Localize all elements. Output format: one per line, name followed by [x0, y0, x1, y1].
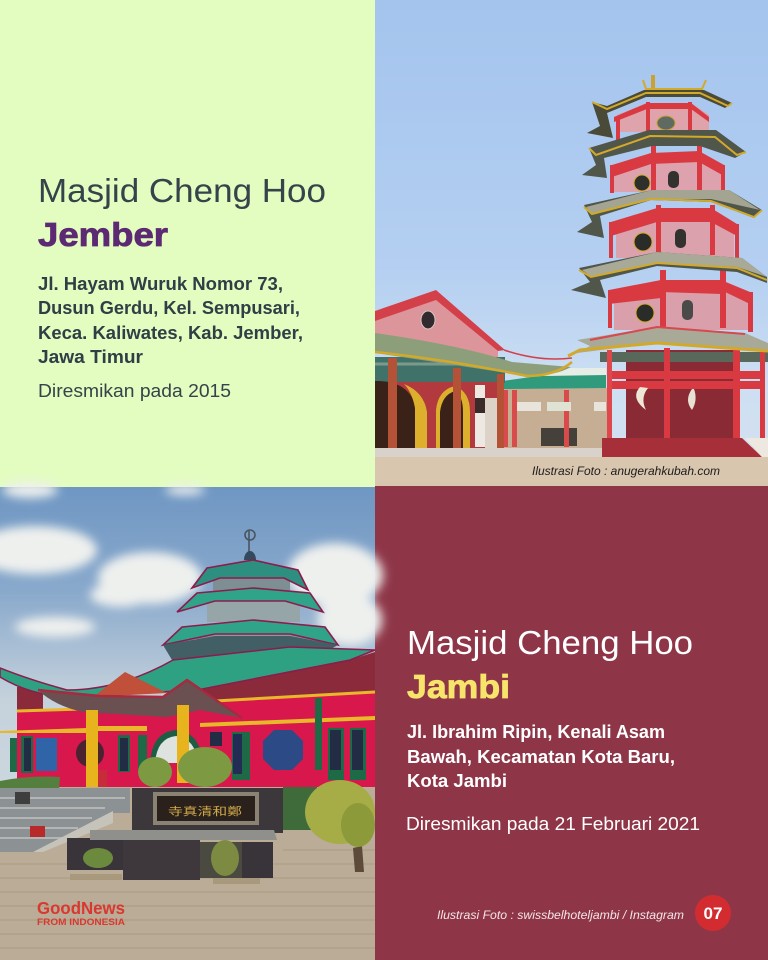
lattice band — [197, 652, 375, 702]
tier 4 roof — [582, 130, 746, 178]
hall columns — [388, 358, 397, 448]
pagoda tower — [568, 75, 768, 457]
tier 3 body — [616, 213, 734, 258]
address — [38, 274, 303, 367]
tier 2 roof — [571, 252, 767, 298]
ground tier — [626, 350, 736, 438]
yellow columns — [86, 710, 98, 788]
pagoda roof — [163, 530, 338, 660]
plinth — [602, 438, 762, 457]
tier 3 roof — [577, 190, 762, 238]
address: Jawa Timur — [38, 347, 143, 367]
windows — [10, 698, 366, 787]
heading: Jambi: Jambi — [407, 668, 510, 705]
address: Jl. Hayam Wuruk Nomor 73, — [38, 274, 283, 294]
monument with plaque: 寺真清和鄭 — [168, 804, 242, 818]
teal main roof — [0, 647, 375, 697]
entrance canopy — [38, 672, 242, 718]
tree — [305, 780, 375, 872]
panel: Jember text — [0, 0, 375, 487]
address — [407, 722, 675, 791]
tier 4 body — [614, 153, 722, 192]
page number badge — [695, 895, 731, 931]
finial — [651, 75, 655, 89]
ground — [375, 457, 768, 487]
address: Bawah, Kecamatan Kota Baru, — [407, 747, 675, 767]
heading: Masjid Cheng Hoo: Masjid Cheng Hoo — [38, 172, 326, 209]
plants at monument base — [70, 840, 260, 884]
logo: GoodNews from Indonesia: GoodNews — [37, 898, 125, 918]
panel: photo of Jember mosque — [375, 0, 768, 487]
monument with plaque — [67, 788, 283, 880]
logo: GoodNews from Indonesia — [37, 898, 125, 928]
hedge — [0, 776, 317, 830]
heading: Jember: Jember — [38, 216, 168, 253]
ground roof — [577, 327, 768, 353]
address: Jl. Ibrahim Ripin, Kenali Asam — [407, 722, 665, 742]
tier 2 body — [614, 285, 749, 330]
bushes — [138, 747, 232, 787]
stairs — [0, 788, 130, 852]
inauguration date: Diresmikan pada 21 Februari 2021 — [406, 814, 700, 834]
green tile roof — [375, 333, 571, 376]
frieze — [375, 357, 505, 383]
panel: Jambi text — [375, 486, 768, 960]
caption: photo credit: Ilustrasi Foto : swissbelhoteljambi / Instagram — [437, 908, 684, 922]
clouds — [0, 482, 383, 646]
address: Kota Jambi — [407, 771, 507, 791]
yellow eaves — [0, 716, 375, 733]
paving — [0, 787, 375, 960]
main hall — [375, 290, 572, 448]
page number badge: 07 — [704, 904, 722, 923]
lower wall and arches — [375, 382, 500, 448]
red wall — [17, 692, 375, 788]
address: Keca. Kaliwates, Kab. Jember, — [38, 323, 303, 343]
wall yellow line — [17, 692, 375, 711]
address: Dusun Gerdu, Kel. Sempusari, — [38, 298, 300, 318]
tier 5 roof — [587, 90, 732, 138]
gable wall — [375, 298, 498, 372]
tan rear building — [503, 368, 610, 448]
logo: GoodNews from Indonesia: FROM INDONESIA — [37, 917, 125, 928]
panel: photo of Jambi mosque — [0, 482, 383, 960]
tier 5 body — [617, 103, 709, 132]
caption: photo credit: Ilustrasi Foto : anugerahkubah.com — [532, 464, 720, 478]
inauguration date: Diresmikan pada 2015 — [38, 381, 231, 401]
heading: Masjid Cheng Hoo: Masjid Cheng Hoo — [407, 624, 693, 661]
